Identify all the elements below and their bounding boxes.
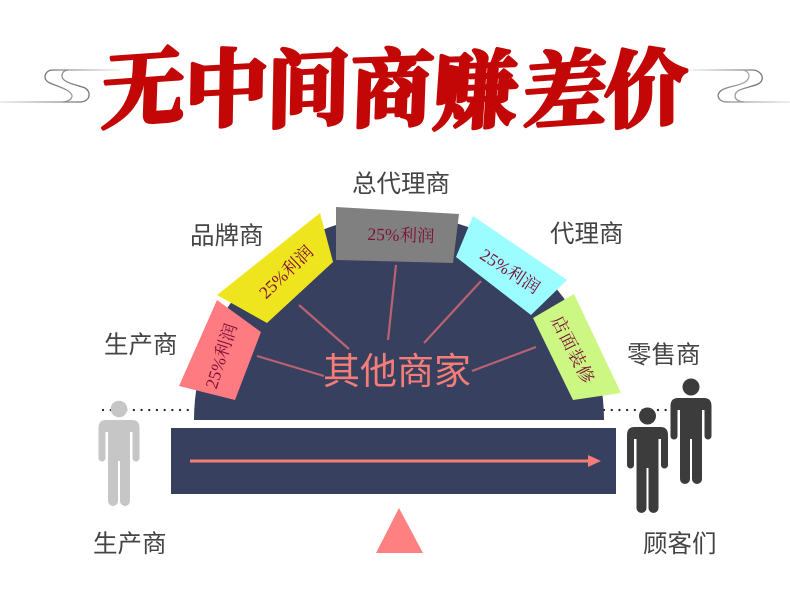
segment: general agent profit [336,207,459,263]
beam with arrow [171,428,616,494]
decorative swirl: left [0,70,120,102]
label: brand: 品牌商 [190,222,264,250]
label: producer lower: 生产商 [93,530,166,558]
fulcrum triangle [376,508,423,553]
segment: producer profit: 25%利润 [201,321,241,391]
segment: store decoration [533,294,621,400]
dotted line: right [604,409,668,411]
label: producer upper: 生产商 [104,331,178,359]
title: 间 [266,43,351,140]
title: 赚 [431,46,521,141]
label: customers: 顾客们 [643,530,716,558]
label: general agent: 总代理商 [352,170,450,198]
title: 商 [348,43,436,139]
icon: customer person front [627,408,668,513]
segment: brand profit [217,213,333,323]
segment: agent profit [456,216,567,315]
central label: 其他商家 [323,351,471,392]
title: 中 [184,43,269,140]
icon: producer person [98,401,140,506]
segment: producer profit [179,300,261,400]
title: 无 [99,42,186,141]
segment: store decoration: 店面装修 [547,312,599,388]
title: 差 [521,44,608,143]
segment: brand profit: 25%利润 [255,242,317,302]
connector lines [257,265,536,376]
decorative swirl: right [690,70,790,102]
label: retailer: 零售商 [627,341,700,369]
icon: customer person back [670,378,712,484]
dotted line: left [103,409,190,411]
label: agent: 代理商 [550,220,624,248]
semicircle: other merchants [194,215,604,420]
title: 价 [604,42,688,141]
title [99,42,688,143]
segment: agent profit: 25%利润 [476,244,544,298]
segment: general agent profit: 25%利润 [367,224,435,246]
